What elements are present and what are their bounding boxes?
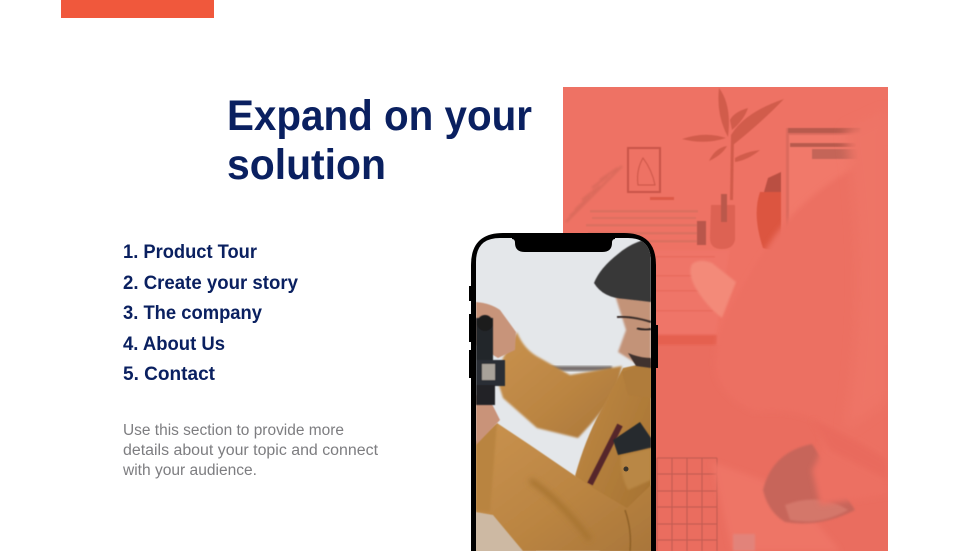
orange vase: [757, 172, 781, 250]
fern: [566, 166, 622, 222]
forearm sleeve: [476, 423, 651, 551]
sleeve and body foreground: [764, 178, 850, 506]
wall art frame: [628, 148, 660, 192]
camera: [476, 315, 505, 405]
wire grid: [657, 458, 717, 551]
title: Expand on your: [227, 92, 532, 140]
decorative bottom scrap: [733, 534, 755, 551]
monitor: [786, 128, 860, 221]
hand holding camera: [476, 302, 516, 358]
face: [615, 295, 651, 366]
phone body: [471, 233, 656, 551]
stacked books: [586, 197, 706, 245]
body text: with your audience.: [122, 462, 257, 479]
torso jacket: [575, 362, 651, 551]
plant leaves: [682, 88, 784, 200]
pocket phone: [613, 422, 651, 455]
phone side buttons: [469, 286, 658, 378]
body text: details about your topic and connect: [123, 442, 379, 459]
dark bag: [763, 444, 855, 524]
white cloth over grid: [713, 462, 718, 493]
phone screen photo: [476, 238, 651, 551]
numbered list: 4. About Us: [123, 334, 225, 355]
numbered list: 3. The company: [123, 303, 262, 324]
numbered list: [123, 242, 298, 385]
top accent bar: [61, 0, 214, 18]
numbered list: 2. Create your story: [123, 273, 298, 294]
body text: Use this section to provide more: [123, 422, 344, 439]
sleeve upper arm: [498, 332, 622, 438]
title: solution: [227, 141, 386, 189]
hand: [690, 261, 736, 318]
title: [227, 92, 532, 189]
panel: coral tinted desk photo: [563, 87, 888, 551]
glass vase: [710, 194, 735, 249]
inner shirt strap: [590, 425, 620, 484]
body text: [122, 422, 379, 479]
hair: [594, 238, 651, 302]
numbered list: 5. Contact: [123, 364, 216, 385]
desk surface: [563, 250, 730, 335]
phone notch: [512, 236, 615, 252]
numbered list: 1. Product Tour: [123, 242, 258, 263]
phone mockup: [469, 233, 658, 551]
